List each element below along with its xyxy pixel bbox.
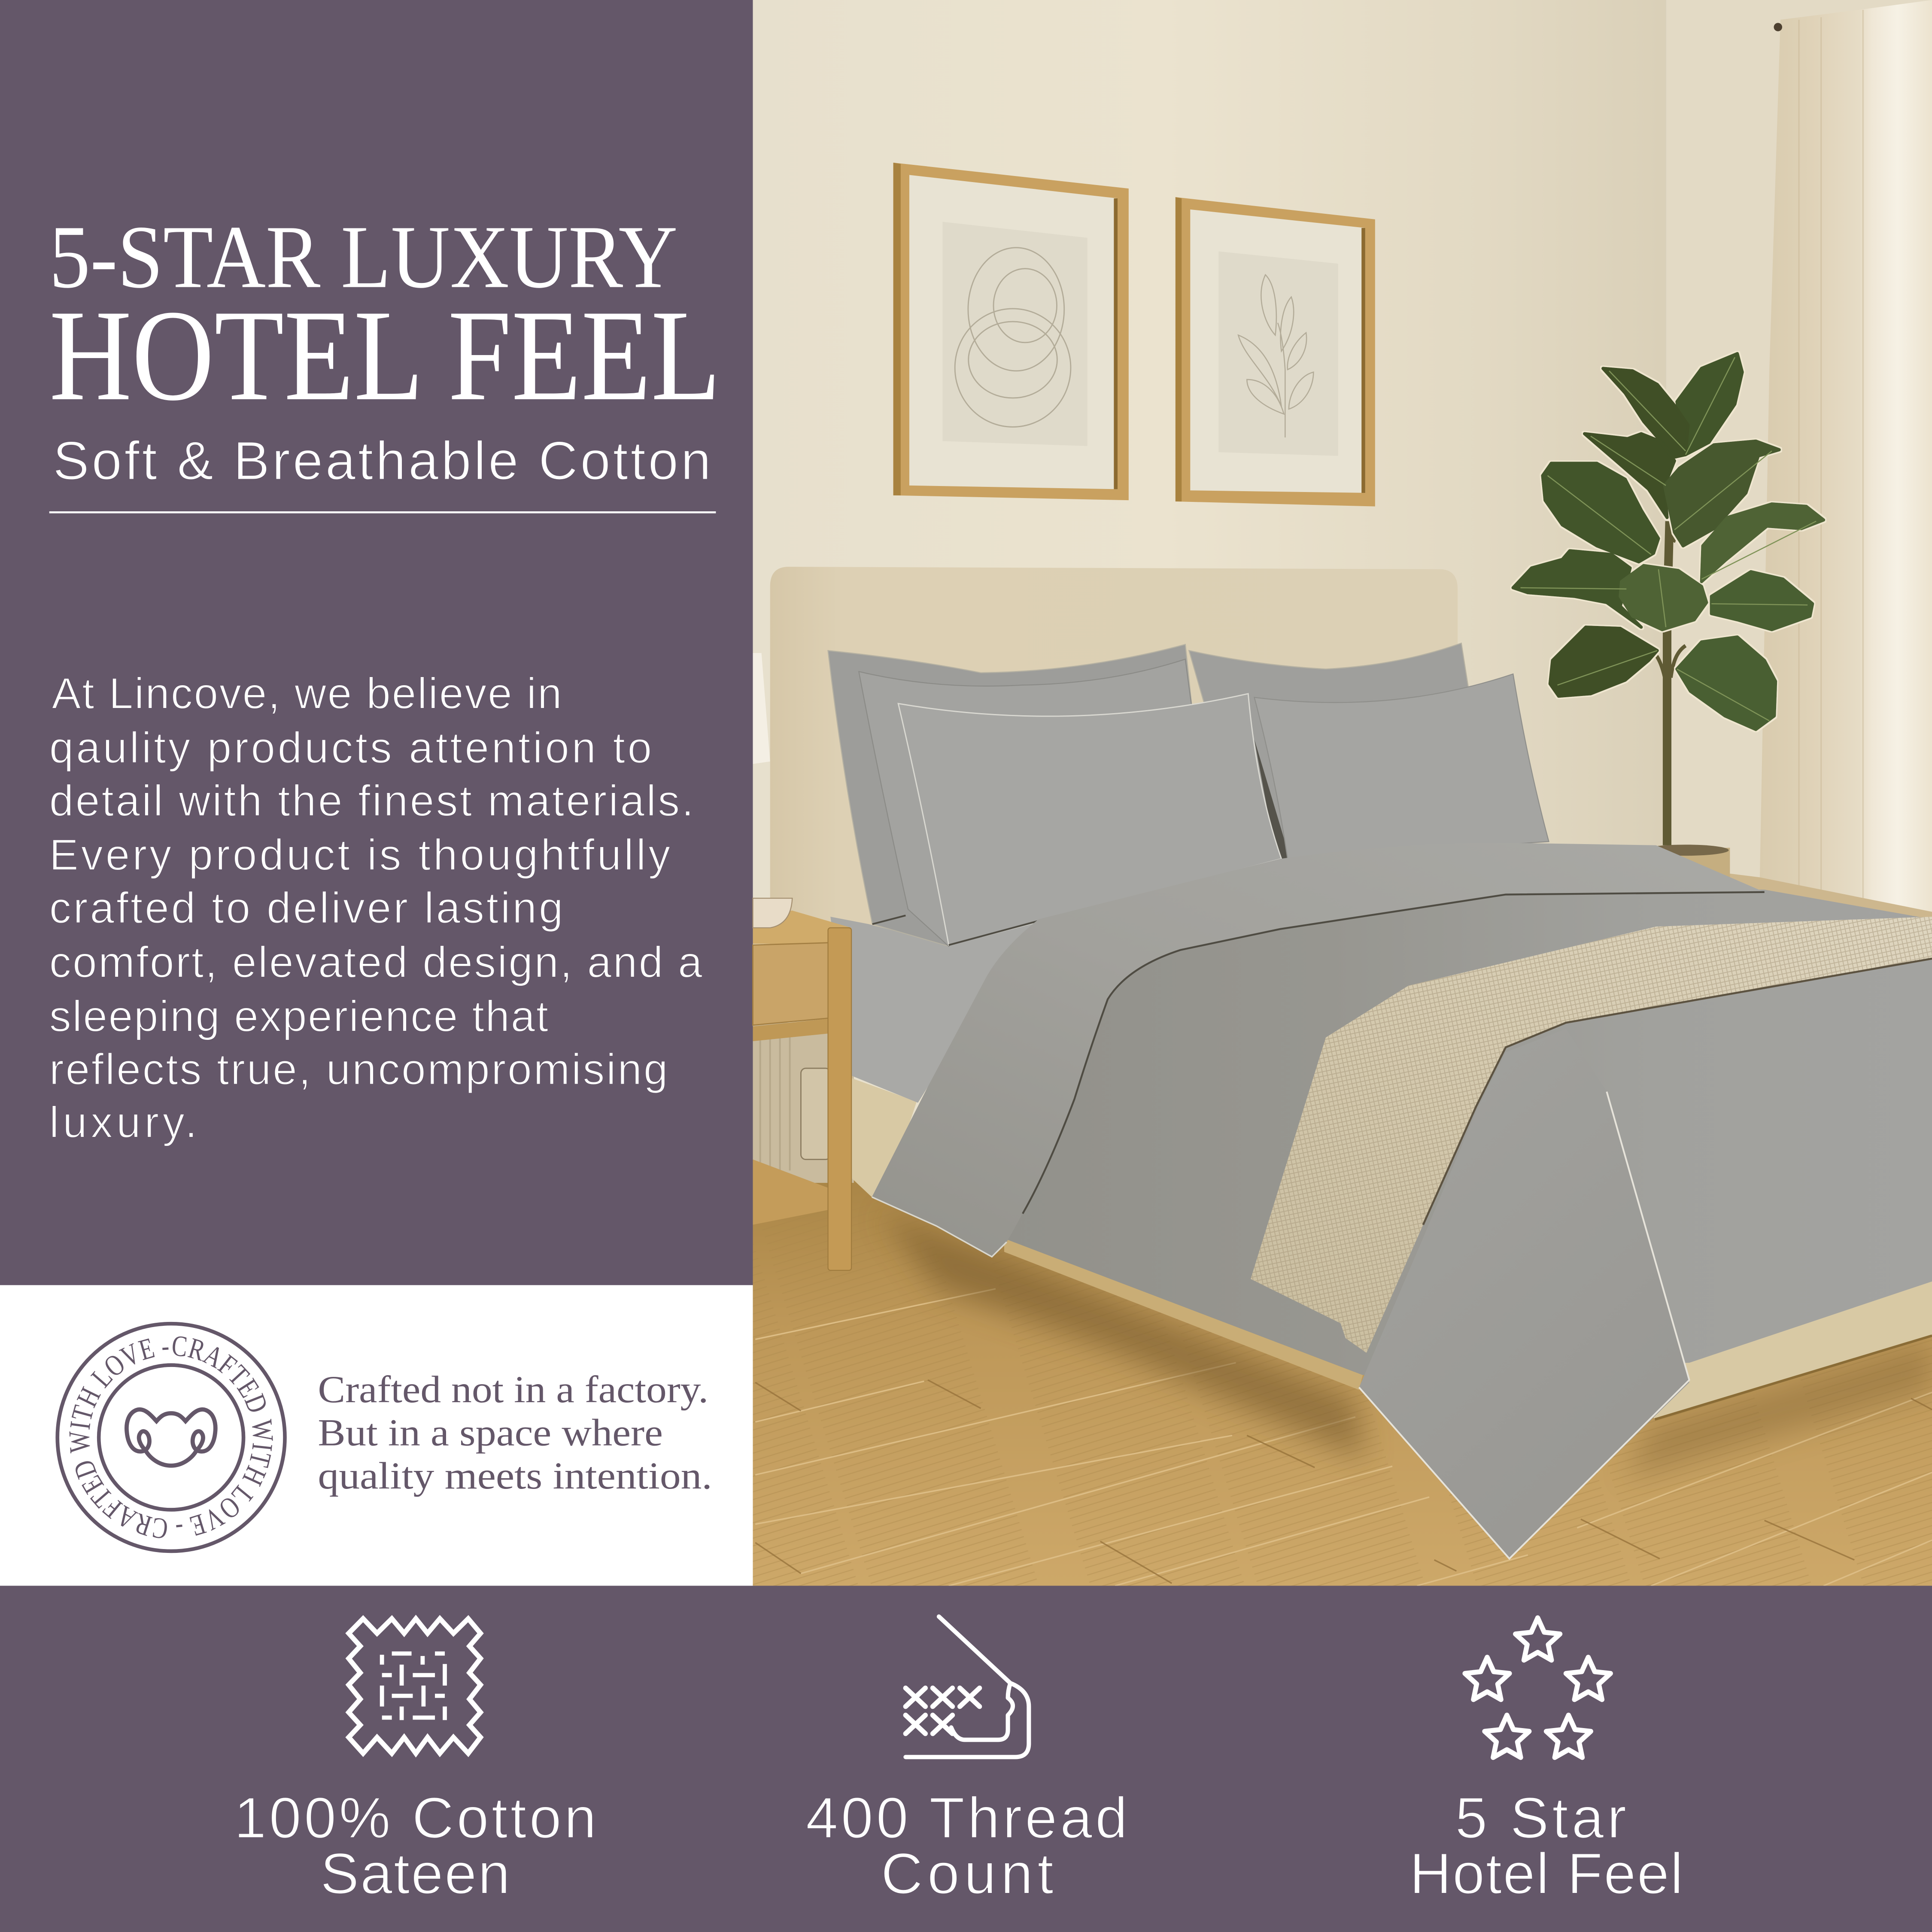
plant [1513,354,1823,877]
bed base right edge [1655,1336,1932,1419]
product photo: bedroom [753,0,1932,1586]
curtain [1759,0,1932,918]
craft statement: quality meets intention. [318,1455,712,1497]
nightstand leg [828,928,851,1270]
floor planks [755,1289,1932,1586]
body paragraph: At Lincove, we believe in [52,669,562,718]
bed floor shadow [881,1214,1365,1460]
bed runner [1251,917,1932,1353]
nightstand rail [753,1018,838,1041]
fold piping [872,1197,1007,1257]
bowl [753,898,792,928]
pillow under shadow [872,915,1045,945]
plant leaves [1513,354,1823,729]
pillow back left [828,644,1193,946]
icon: fabric swatch [349,1619,480,1753]
duvet turned-down fold [872,843,1765,1257]
wall socket [801,1068,830,1160]
body paragraph: reflects true, uncompromising [49,1045,668,1094]
wall stripes [760,1027,790,1170]
feature: cotton sateen [234,1619,596,1906]
pillow back right [1189,643,1469,859]
left wall behind nightstand [753,1023,854,1183]
body paragraph [49,669,702,1147]
body paragraph: sleeping experience that [49,992,548,1041]
plant stem [1667,521,1670,845]
body paragraph: luxury. [49,1098,197,1147]
fold shadow line [1023,892,1765,1214]
title line one: 5-STAR LUXURY [49,207,677,307]
white background [0,1285,753,1586]
headboard [770,567,1458,949]
baseboard right [1602,857,1932,936]
strip background [0,1586,1932,1932]
bed base foot strip [1004,1238,1363,1390]
sheet [830,909,1066,1103]
bed base left [851,1078,917,1198]
lamp [753,653,770,764]
flap edge highlight [1359,1092,1689,1558]
title line two: HOTEL FEEL [49,283,721,428]
bed right floor shadow [1626,1340,1932,1479]
plant leaf veins [1520,357,1816,721]
label: hotel feel: Hotel Feel [1410,1841,1683,1906]
side wall [1666,0,1932,986]
label: sateen: Sateen [320,1841,510,1906]
icon: five stars [1465,1618,1610,1758]
framed art left [893,163,1129,500]
panel: crafted with love [0,1285,753,1586]
label: count: Count [881,1841,1054,1906]
nightstand drawer [753,942,833,1025]
badge mask logo [127,1410,216,1466]
feature: thread count [806,1616,1127,1906]
body paragraph: detail with the finest materials. [49,776,694,825]
curtain rod knob [1774,23,1782,31]
body paragraph: Every product is thoughtfully [49,830,670,879]
label: thread: 400 Thread [806,1785,1127,1850]
craft statement: Crafted not in a factory. [318,1369,708,1411]
floor [753,1177,1932,1586]
pillow gap shadow [1255,739,1290,859]
framed art right [1176,197,1375,507]
label: five star: 5 Star [1455,1785,1626,1850]
badge circular text: CRAFTED WITH LOVE - CRAFTED WITH LOVE - [63,1329,280,1546]
plant branch stems [1649,524,1686,690]
pillow back left inner fold [859,659,1193,946]
badge [58,1324,285,1551]
body paragraph: qaulity products attention to [49,723,652,772]
label: cotton: 100% Cotton [234,1785,596,1850]
floor grain [753,1177,1932,1586]
subtitle rule [49,511,716,513]
body paragraph: crafted to deliver lasting [49,884,563,933]
panel: intro [0,0,753,1285]
feature: five star [1410,1618,1683,1906]
duvet corner flap [1359,1029,1689,1558]
panel background [0,0,753,1285]
wall [753,0,1666,1232]
pillow front left [898,694,1282,945]
nightstand shelf [753,1160,828,1225]
badge inner ring [99,1365,243,1510]
duvet body [1000,890,1932,1375]
body paragraph: comfort, elevated design, and a [49,938,702,987]
craft statement [318,1369,712,1497]
nightstand [753,898,851,1270]
badge outer ring [58,1324,285,1551]
icon: needle and stitches [905,1616,1029,1757]
panel: feature strip [0,1586,1932,1932]
craft statement: But in a space where [318,1412,663,1454]
pillow front right [1255,674,1549,859]
plant pot [1645,848,1730,877]
bed base right [1639,1276,1932,1419]
nightstand top [753,911,851,944]
subtitle: Soft & Breathable Cotton [53,430,711,491]
